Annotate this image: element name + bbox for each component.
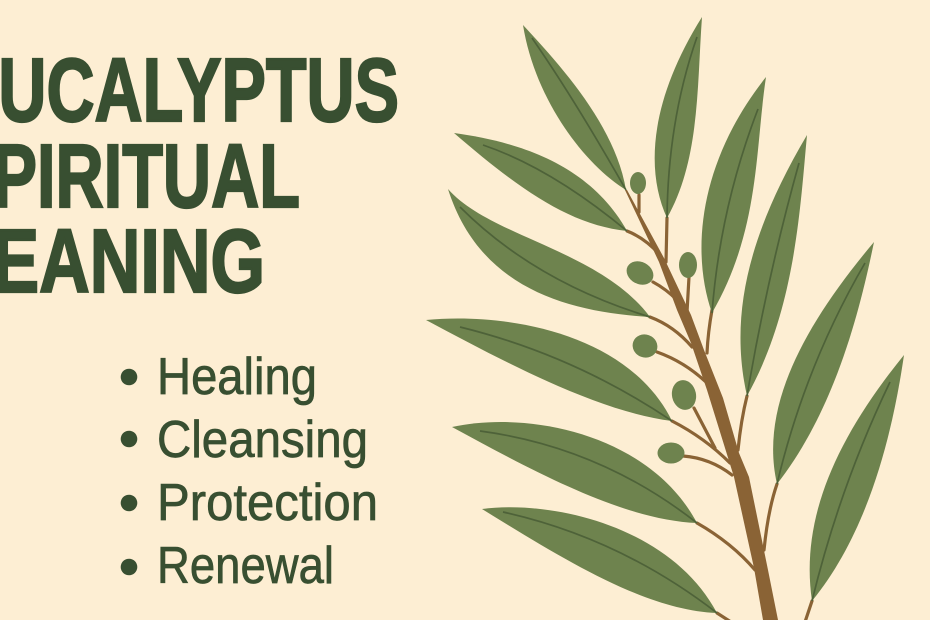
- leaves: left side: [426, 25, 717, 613]
- item: cleansing: Cleansing: [157, 411, 368, 469]
- berries: [622, 172, 699, 464]
- title: [0, 41, 399, 312]
- leaves: right side: [655, 17, 904, 601]
- branch stems: [627, 195, 812, 620]
- item: renewal: Renewal: [157, 537, 334, 595]
- item: healing: Healing: [157, 348, 317, 406]
- illustration: eucalyptus branch: [426, 17, 904, 620]
- item: protection: Protection: [157, 474, 378, 532]
- leaf veins: [460, 37, 890, 613]
- main stem: [625, 190, 778, 620]
- bullet list: [121, 348, 378, 595]
